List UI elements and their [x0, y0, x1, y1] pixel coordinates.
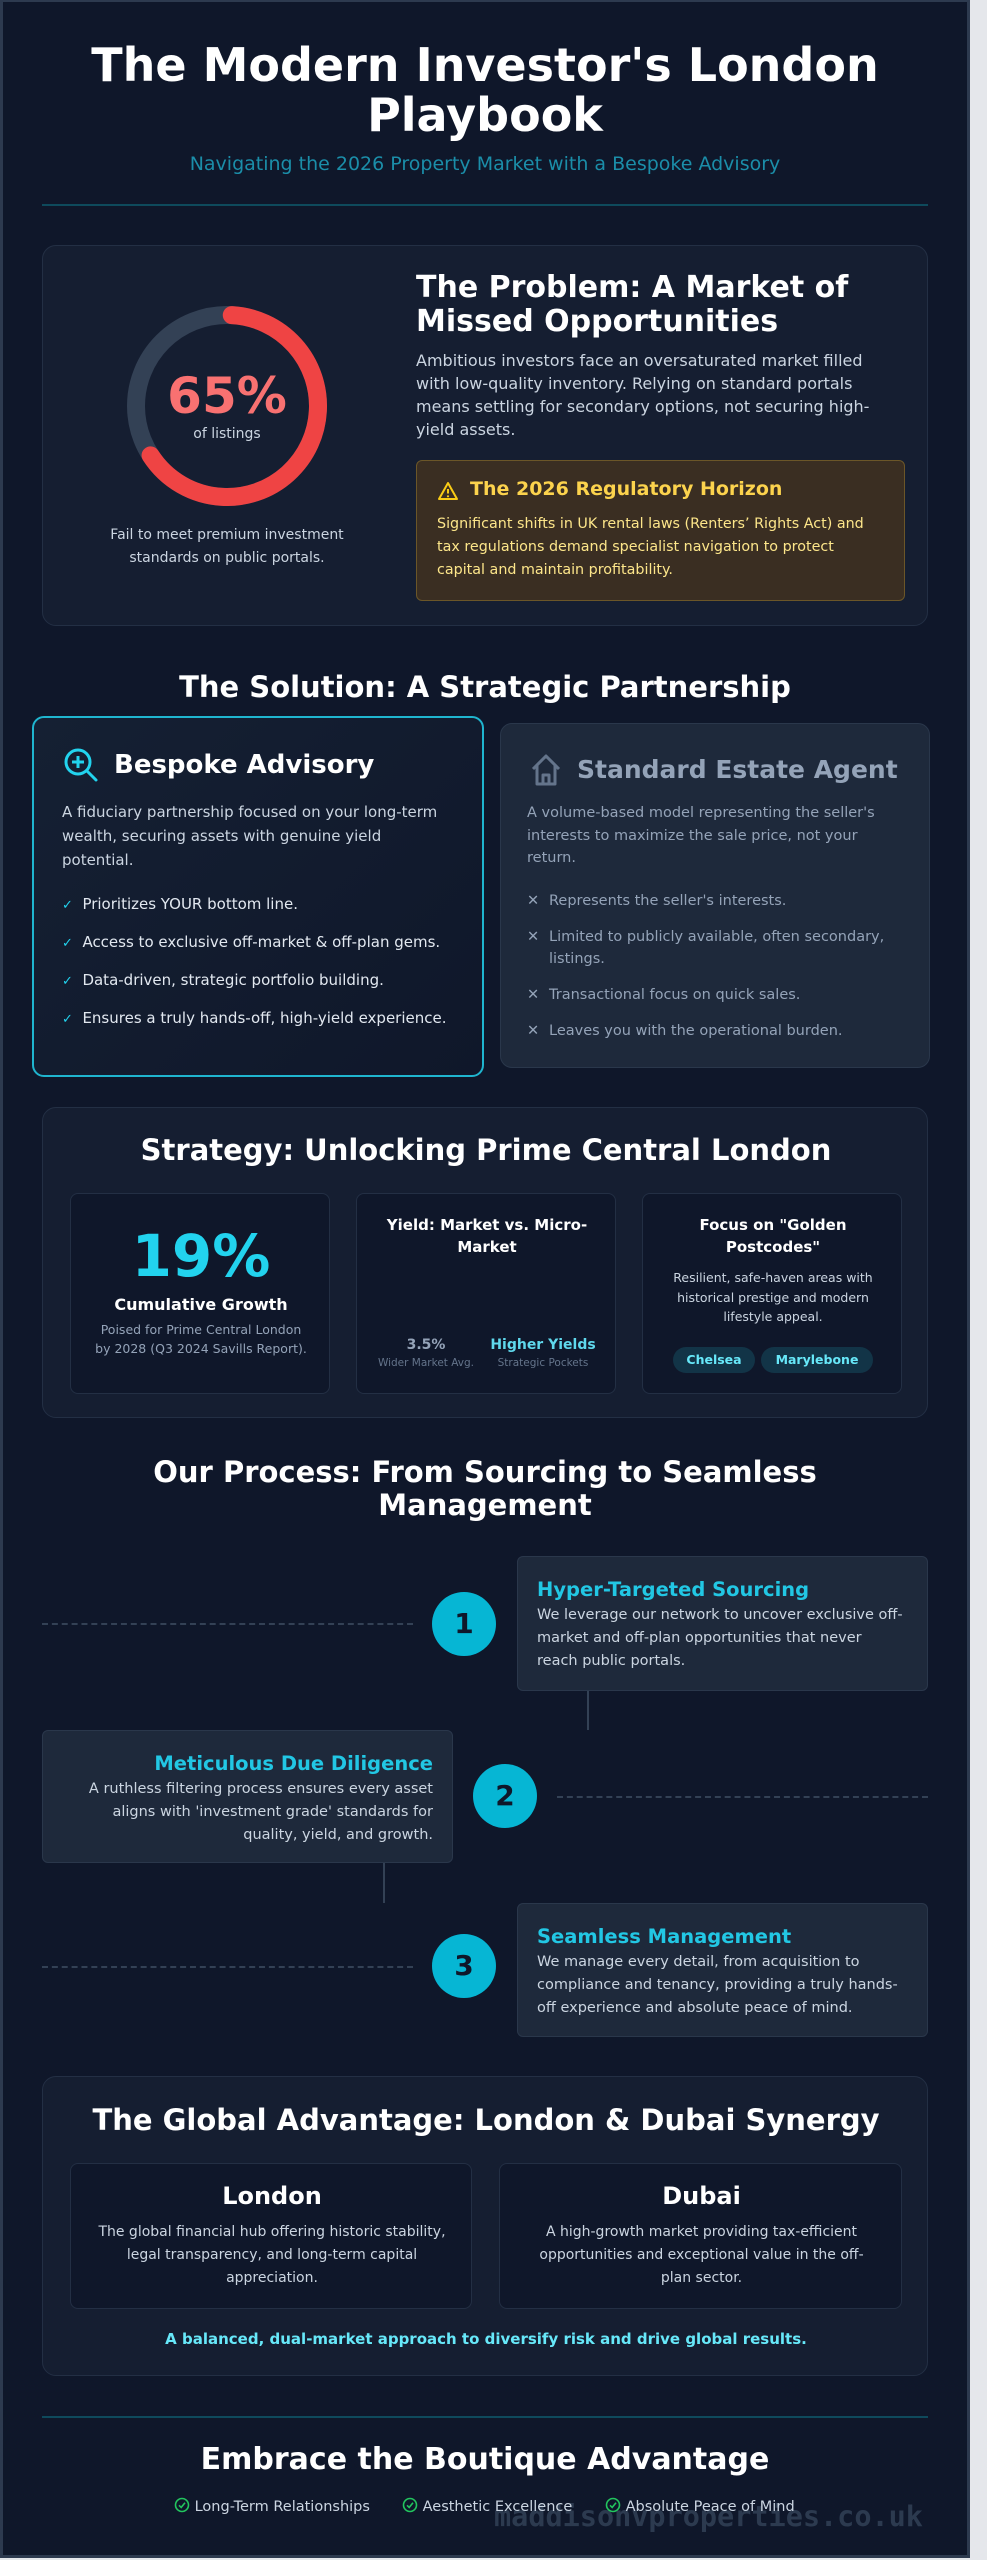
card: yield comparison: Higher Yields [490, 1337, 596, 1353]
agent bullets: ✕ [527, 929, 539, 945]
bespoke bullets: ✓ Access to exclusive off-market & off-plan gems. [62, 933, 440, 951]
callout: regulatory horizon [416, 460, 905, 601]
card: growth stat: Cumulative Growth [114, 1295, 288, 1314]
icon: number 1: 1 [454, 1607, 474, 1640]
donut caption: Fail to meet premium investment [110, 527, 344, 543]
heading: boutique advantage: Embrace the Boutique Advantage [201, 2442, 769, 2477]
bespoke bullets: ✓ Ensures a truly hands-off, high-yield experience. [62, 1009, 446, 1027]
card: dubai: Dubai [662, 2182, 741, 2210]
panel: problem [42, 245, 928, 626]
process timeline [42, 1556, 928, 2037]
panel: strategy [42, 1107, 928, 1418]
icon: number 2: 2 [495, 1779, 515, 1812]
donut chart: 65% [167, 367, 287, 425]
card: london: London [222, 2182, 322, 2210]
step 3: Seamless Management [537, 1925, 791, 1948]
watermark: maddisonvproperties.co.uk [494, 2500, 923, 2533]
step 1: We leverage our network to uncover exclusive off-market and off-plan opportunities that never reach public portals. [537, 1607, 903, 1669]
agent bullets [527, 893, 884, 1039]
yield values: 3.5% [407, 1337, 445, 1353]
donut chart: of listings [193, 426, 261, 442]
icon: warning [438, 482, 458, 500]
value checklist [174, 2498, 795, 2515]
donut caption [110, 527, 344, 566]
icon: number 3: 3 [454, 1949, 474, 1982]
panel: bespoke advisory: Bespoke Advisory [114, 750, 374, 780]
callout: regulatory horizon: The 2026 Regulatory Horizon [470, 478, 782, 500]
heading: solution: The Solution: A Strategic Partnership [179, 670, 791, 704]
card: london [70, 2163, 472, 2309]
icon: house [532, 754, 560, 786]
panel: standard estate agent: Standard Estate Agent [577, 755, 898, 784]
title [91, 38, 879, 142]
tagline: A balanced, dual-market approach to diversify risk and drive global results. [165, 2330, 807, 2348]
card: growth stat: Poised for Prime Central London [101, 1322, 301, 1337]
callout: regulatory horizon: Significant shifts in UK rental laws (Renters’ Rights Act) and tax regulations demand specialist navigation to protect capital and maintain profitability. [437, 516, 864, 578]
agent bullets: ✕ [527, 987, 539, 1003]
agent bullets: Leaves you with the operational burden. [549, 1023, 842, 1039]
card: yield comparison: Yield: Market vs. Micro-Market [387, 1216, 587, 1256]
problem heading: The Problem: A Market of [416, 270, 848, 305]
value checklist: Aesthetic Excellence [423, 2499, 572, 2515]
icon: number 1 [432, 1592, 496, 1656]
icon: number 2 [473, 1764, 537, 1828]
heading: process [153, 1455, 817, 1522]
card: london: The global financial hub offering historic stability, legal transparency, and long-term capital appreciation. [98, 2224, 446, 2286]
icon: magnifier [64, 748, 98, 782]
card: golden postcodes: Resilient, safe-haven areas with historical prestige and modern lifestyle appeal. [673, 1270, 873, 1324]
bespoke bullets [62, 895, 446, 1027]
panel: global advantage [42, 2076, 928, 2376]
title: The Modern Investor's London [91, 38, 879, 92]
agent bullets: Limited to publicly available, often secondary, listings. [549, 929, 884, 967]
step 1: Hyper-Targeted Sourcing [537, 1578, 809, 1601]
problem heading: Missed Opportunities [416, 304, 778, 339]
heading: process: Management [378, 1488, 592, 1522]
icon: number 3 [432, 1934, 496, 1998]
panel: standard estate agent [500, 723, 930, 1068]
card: yield comparison [356, 1193, 616, 1394]
card: dubai: A high-growth market providing tax-efficient opportunities and exceptional value in the off-plan sector. [539, 2224, 864, 2286]
step 3: We manage every detail, from acquisition to compliance and tenancy, providing a truly hands-off experience and absolute peace of mind. [537, 1954, 898, 2016]
pills [673, 1347, 755, 1373]
card: golden postcodes: Marylebone [776, 1352, 858, 1367]
bespoke description: A fiduciary partnership focused on your long-term wealth, securing assets with genuine yield potential. [62, 803, 437, 869]
bespoke bullets: ✓ Prioritizes YOUR bottom line. [62, 895, 298, 913]
card: golden postcodes: Focus on "Golden [699, 1216, 847, 1234]
agent bullets: Represents the seller's interests. [549, 893, 786, 909]
card: golden postcodes: Postcodes" [726, 1238, 820, 1256]
donut caption: standards on public portals. [129, 550, 325, 566]
global heading: The Global Advantage: London & Dubai Synergy [92, 2103, 880, 2137]
card: yield comparison: Wider Market Avg. [378, 1357, 474, 1369]
subtitle: Navigating the 2026 Property Market with a Bespoke Advisory [190, 153, 780, 175]
value checklist: Absolute Peace of Mind [626, 2499, 795, 2515]
problem heading [416, 270, 849, 339]
agent description: A volume-based model representing the seller's interests to maximize the sale price, not your return. [527, 805, 875, 866]
strategy heading: Strategy: Unlocking Prime Central London [141, 1133, 831, 1167]
step 2 [42, 1730, 537, 1863]
card: yield comparison: Strategic Pockets [498, 1357, 588, 1369]
card: growth stat: 19% [132, 1222, 270, 1290]
bespoke bullets: ✓ Data-driven, strategic portfolio building. [62, 971, 384, 989]
card: growth stat [70, 1193, 330, 1394]
step 2: A ruthless filtering process ensures every asset aligns with 'investment grade' standards for quality, yield, and growth. [89, 1781, 433, 1843]
title: Playbook [367, 88, 603, 142]
donut chart [127, 306, 327, 506]
step 1 [432, 1556, 928, 1691]
panel: bespoke advisory [32, 716, 484, 1077]
value checklist: Long-Term Relationships [195, 2499, 370, 2515]
card: dubai [499, 2163, 902, 2309]
heading: process: Our Process: From Sourcing to Seamless [153, 1455, 817, 1489]
agent bullets: ✕ [527, 893, 539, 909]
agent bullets: Transactional focus on quick sales. [549, 987, 800, 1003]
agent bullets: ✕ [527, 1023, 539, 1039]
card: golden postcodes [642, 1193, 902, 1394]
step 2: Meticulous Due Diligence [154, 1752, 433, 1775]
pills: Chelsea [686, 1352, 742, 1367]
step 3 [432, 1903, 928, 2037]
card: growth stat: by 2028 (Q3 2024 Savills Report). [95, 1341, 307, 1356]
problem paragraph: Ambitious investors face an oversaturated market filled with low-quality inventory. Relying on standard portals means settling for secondary options, not securing high-yield assets. [416, 351, 869, 439]
